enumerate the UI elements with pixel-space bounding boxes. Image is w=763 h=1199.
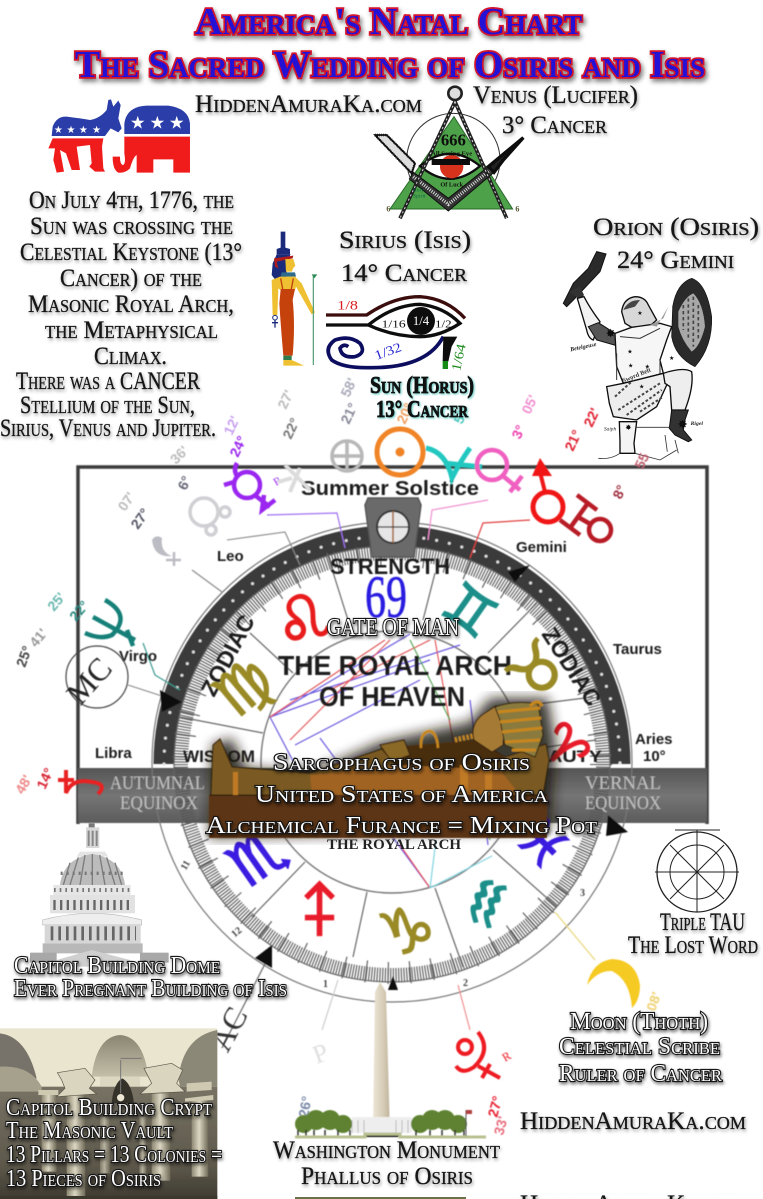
website credit bottom: HiddenAmuraKa.com bbox=[520, 1108, 746, 1135]
chart labels: 2 bbox=[463, 978, 468, 989]
degree labels bbox=[12, 375, 664, 1137]
chart labels: EQUINOX bbox=[585, 793, 661, 814]
icon: donkey and elephant: ★ bbox=[150, 113, 165, 132]
chart labels: 12 bbox=[229, 925, 244, 940]
Mars bbox=[532, 458, 563, 522]
degree labels: 08' bbox=[643, 990, 664, 1013]
icon: Eye of Horus: 1/4 bbox=[413, 314, 430, 328]
title: America's Natal Chart bbox=[195, 1, 582, 43]
planet connector lines bbox=[267, 513, 345, 548]
icon: donkey and elephant: ★ bbox=[169, 113, 184, 132]
text block: July 4th 1776: Sirius, Venus and Jupiter. bbox=[0, 415, 216, 442]
label: Sun Horus bbox=[370, 373, 474, 423]
caption: Capitol dome bbox=[14, 953, 287, 1002]
part of fortune bbox=[332, 441, 362, 471]
degree labels: 3° bbox=[508, 422, 528, 441]
label: Venus: 3° Cancer bbox=[502, 112, 607, 139]
icon: Eye of Horus: 1/32 bbox=[373, 339, 403, 363]
zodiac ring bbox=[152, 522, 632, 1002]
icon: Eye of Horus: 1/16 bbox=[382, 318, 406, 330]
text block: July 4th 1776: Climax. bbox=[94, 343, 167, 370]
Neptune bbox=[85, 600, 135, 646]
degree labels: 8° bbox=[609, 482, 629, 501]
chart frame bbox=[78, 467, 707, 824]
caption: crypt: 13 Pieces of Osiris bbox=[6, 1166, 161, 1192]
icon: Orion figure: ★ bbox=[627, 348, 633, 355]
icon: Eye of Horus: 1/64 bbox=[448, 342, 469, 372]
icon: triple tau chart bbox=[655, 830, 739, 912]
icon: Orion figure: ✸ bbox=[677, 417, 688, 431]
Lilith bbox=[152, 536, 181, 566]
label: Gate of Man: GATE OF MAN bbox=[327, 615, 459, 641]
text block: July 4th 1776: Masonic Royal Arch, bbox=[28, 291, 234, 318]
text block: July 4th 1776: There was a CANCER bbox=[16, 368, 200, 395]
caption: Moon: Ruler of Cancer bbox=[559, 1061, 723, 1087]
icon: masonic compass with all-seeing eye: All Seeing Eye bbox=[431, 151, 472, 158]
icon: masonic compass with all-seeing eye: 666 bbox=[441, 131, 466, 150]
chart labels: Aries bbox=[635, 731, 673, 748]
chart labels: WISDOM bbox=[183, 747, 255, 766]
zodiac glyphs: ♍ bbox=[201, 644, 287, 732]
icon: donkey and elephant bbox=[48, 99, 190, 173]
house division lines bbox=[180, 553, 596, 967]
caption: crypt bbox=[6, 1095, 222, 1192]
caption: Washington Monument bbox=[273, 1137, 500, 1190]
zodiac glyphs: ♈ bbox=[528, 711, 601, 784]
degree labels: 27' bbox=[274, 387, 297, 411]
label: Orion bbox=[593, 214, 759, 274]
caption: sarcophagus: Sarcophagus of Osiris bbox=[273, 750, 530, 776]
sun bbox=[377, 429, 423, 475]
label: Sun Horus: 13° Cancer bbox=[376, 397, 469, 423]
degree labels: 21° bbox=[561, 427, 585, 453]
icon: Orion figure: ✸ bbox=[625, 423, 631, 432]
zodiac glyphs: ♏ bbox=[215, 814, 300, 902]
chart labels: Leo bbox=[217, 548, 244, 565]
degree labels: 55 bbox=[631, 450, 652, 471]
icon: Orion figure: Betelgeuse bbox=[569, 342, 597, 353]
icon: donkey and elephant: ★ bbox=[130, 113, 145, 132]
Mercury: R bbox=[272, 474, 284, 489]
caption: sarcophagus: United States of America bbox=[255, 782, 549, 808]
chart labels: 1 bbox=[323, 979, 328, 990]
caption: sarcophagus: Alchemical Furance = Mixing Pot bbox=[206, 813, 598, 839]
zodiac glyphs: ♓ bbox=[503, 804, 582, 883]
icon: Eye of Horus: 1/8 bbox=[337, 299, 358, 313]
chart labels: Summer Solstice bbox=[301, 478, 479, 500]
degree labels: 25° bbox=[13, 644, 35, 669]
degree labels: 14° bbox=[33, 765, 57, 791]
chart labels bbox=[95, 478, 673, 990]
degree labels: 07' bbox=[114, 489, 138, 514]
degree labels: 22' bbox=[580, 405, 603, 429]
text block: July 4th 1776: the Metaphysical bbox=[45, 317, 218, 344]
chart labels: ZODIAC bbox=[195, 610, 260, 700]
degree labels: 27° bbox=[127, 505, 153, 532]
Pluto: R bbox=[500, 1048, 513, 1065]
text block: July 4th 1776: Stellium of the Sun, bbox=[20, 392, 195, 419]
degree labels: 22° bbox=[279, 415, 303, 441]
icon: Eye of Horus: 1/2 bbox=[435, 318, 452, 330]
caption: Capitol dome: Ever Pregnant Building of Isis bbox=[14, 976, 287, 1002]
MC circle: MC bbox=[59, 650, 119, 711]
label: Venus: Venus (Lucifer) bbox=[473, 82, 638, 109]
caption: Moon bbox=[559, 1009, 723, 1087]
chart labels: THE ROYAL ARCH bbox=[278, 650, 512, 681]
north node bbox=[426, 448, 482, 478]
text block: July 4th 1776: Celestial Keystone (13° bbox=[20, 239, 242, 266]
Mercury bbox=[224, 463, 284, 510]
icon: Orion figure: ★ bbox=[645, 363, 650, 370]
zodiac glyphs: ♑ bbox=[371, 888, 443, 973]
Uranus bbox=[560, 495, 611, 541]
keystone bbox=[365, 498, 421, 557]
label: Sirius bbox=[339, 227, 471, 287]
icon: masonic compass with all-seeing eye: Of Luck bbox=[440, 182, 463, 189]
label: Orion: Orion (Osiris) bbox=[593, 214, 759, 241]
degree labels: 41' bbox=[26, 625, 50, 650]
degree labels: 24° bbox=[226, 433, 250, 459]
zodiac glyphs: 69 bbox=[365, 564, 407, 630]
zodiac glyphs: ♌ bbox=[258, 573, 348, 669]
text block: July 4th 1776: Sun was crossing the bbox=[30, 213, 233, 240]
text block: July 4th 1776: On July 4th, 1776, the bbox=[29, 187, 234, 214]
zodiac glyphs: ♊ bbox=[430, 570, 508, 652]
chart labels: OF HEAVEN bbox=[319, 681, 465, 712]
icon: Isis figure bbox=[272, 232, 317, 366]
icon: donkey and elephant: ★ bbox=[79, 125, 88, 136]
icon: Orion figure bbox=[563, 252, 712, 460]
title: The Sacred Wedding of Osiris and Isis bbox=[75, 44, 705, 86]
icon: Orion figure: Sword Belt bbox=[621, 366, 653, 385]
icon: masonic compass with all-seeing eye: 6 bbox=[386, 205, 390, 214]
equinox band bbox=[78, 768, 707, 823]
black arrows on ring bbox=[160, 565, 628, 990]
icon: donkey and elephant: ★ bbox=[54, 125, 63, 136]
icon: Orion figure: Rigel bbox=[690, 421, 703, 427]
icon: donkey and elephant: ★ bbox=[92, 125, 101, 136]
degree labels: 21° bbox=[337, 400, 361, 426]
degree labels: 25' bbox=[44, 589, 68, 614]
zodiac glyphs: ♒ bbox=[443, 864, 532, 943]
icon: Orion figure: ✸ bbox=[606, 326, 616, 340]
caption: crypt: 13 Pillars = 13 Colonies = bbox=[6, 1142, 222, 1168]
degree labels: 22° bbox=[66, 597, 92, 624]
Moon bbox=[587, 959, 640, 1008]
chart labels: ZODIAC bbox=[537, 623, 607, 711]
label: The Royal Arch lower: THE ROYAL ARCH bbox=[327, 837, 461, 853]
chart labels: VERNAL bbox=[585, 773, 661, 794]
planet glyphs bbox=[58, 429, 640, 1078]
label: Sirius: 14° Cancer bbox=[341, 260, 467, 287]
caption: Washington Monument: Phallus of Osiris bbox=[301, 1163, 473, 1190]
chart labels: Gemini bbox=[516, 539, 567, 556]
label: Venus bbox=[473, 82, 638, 139]
title bbox=[75, 1, 705, 86]
faint P: P bbox=[309, 1037, 332, 1070]
degree labels: 58' bbox=[337, 375, 360, 399]
caption: Moon: Moon (Thoth) bbox=[570, 1009, 708, 1035]
degree labels: 26° bbox=[295, 1095, 315, 1119]
icon: donkey and elephant: ★ bbox=[67, 125, 76, 136]
label: Orion: 24° Gemini bbox=[617, 247, 734, 274]
degree labels: 48' bbox=[12, 772, 35, 796]
Pluto bbox=[456, 1032, 513, 1078]
degree labels: 36' bbox=[167, 442, 191, 467]
natal chart wheel bbox=[78, 467, 707, 1048]
icon: Orion figure: ★ bbox=[637, 310, 643, 317]
zodiac glyphs: ♐ bbox=[281, 871, 360, 950]
icon: Orion figure: ★ bbox=[628, 362, 633, 369]
zodiac glyphs bbox=[201, 564, 601, 973]
label: Sun Horus: Sun (Horus) bbox=[370, 373, 474, 399]
label: Sirius: Sirius (Isis) bbox=[339, 227, 471, 254]
chart labels: AUTY bbox=[548, 747, 603, 766]
caption: Moon: Celestial Scribe bbox=[559, 1034, 720, 1060]
caption: Capitol dome: Capitol Building Dome bbox=[14, 953, 220, 979]
caption: triple tau bbox=[628, 909, 758, 959]
aspect lines bbox=[270, 634, 488, 888]
caption: crypt: Capitol Building Crypt bbox=[6, 1095, 213, 1121]
chart labels: AUTUMNAL bbox=[110, 773, 205, 794]
degree labels: 6° bbox=[174, 473, 194, 492]
icon: masonic compass with all-seeing eye bbox=[375, 87, 523, 218]
icon: Orion figure: Saiph bbox=[604, 427, 616, 433]
Saturn bbox=[58, 770, 102, 794]
icon: masonic compass with all-seeing eye: Spirit bbox=[413, 194, 426, 200]
icon: masonic compass with all-seeing eye: Holy bbox=[413, 188, 424, 194]
icon: Orion figure: ★ bbox=[639, 383, 644, 390]
degree labels: 27° bbox=[484, 1094, 505, 1119]
chart labels: EQUINOX bbox=[120, 793, 198, 814]
degree labels: 05' bbox=[518, 392, 541, 416]
chart labels: Taurus bbox=[613, 641, 662, 658]
chart labels: Virgo bbox=[119, 648, 157, 665]
degree labels: 5° bbox=[450, 407, 470, 426]
chart labels: 10° bbox=[643, 748, 666, 765]
degree labels: 20° bbox=[393, 400, 417, 426]
caption: Washington Monument: Washington Monument bbox=[273, 1137, 500, 1164]
chart labels: STRENGTH bbox=[330, 554, 450, 579]
website credit top: HiddenAmuraKa.com bbox=[195, 91, 422, 118]
crypt photo bbox=[0, 1028, 217, 1199]
caption: crypt: The Masonic Vault bbox=[6, 1118, 174, 1144]
Venus bbox=[477, 450, 522, 492]
icon: Orion figure: ★ bbox=[669, 355, 674, 362]
icon: Capitol dome bbox=[30, 823, 169, 967]
icon: masonic compass with all-seeing eye: 6 bbox=[515, 205, 519, 214]
Jupiter bbox=[278, 465, 310, 492]
AC: AC bbox=[202, 1001, 255, 1057]
caption: sarcophagus bbox=[206, 750, 598, 839]
degree labels: 33' bbox=[490, 1114, 511, 1137]
text block: July 4th 1776: Cancer) of the bbox=[60, 265, 202, 292]
Washington Monument bbox=[295, 982, 486, 1137]
sarcophagus of Osiris bbox=[209, 698, 556, 838]
chart labels: 11 bbox=[179, 859, 193, 872]
chart labels: Libra bbox=[95, 745, 132, 762]
degree labels: 12' bbox=[220, 413, 243, 437]
zodiac glyphs: ♉ bbox=[492, 625, 583, 716]
icon: Eye of Horus bbox=[326, 297, 469, 372]
chart labels: 3 bbox=[580, 888, 585, 899]
text block: July 4th 1776 bbox=[0, 187, 242, 442]
node gray bbox=[190, 498, 230, 535]
